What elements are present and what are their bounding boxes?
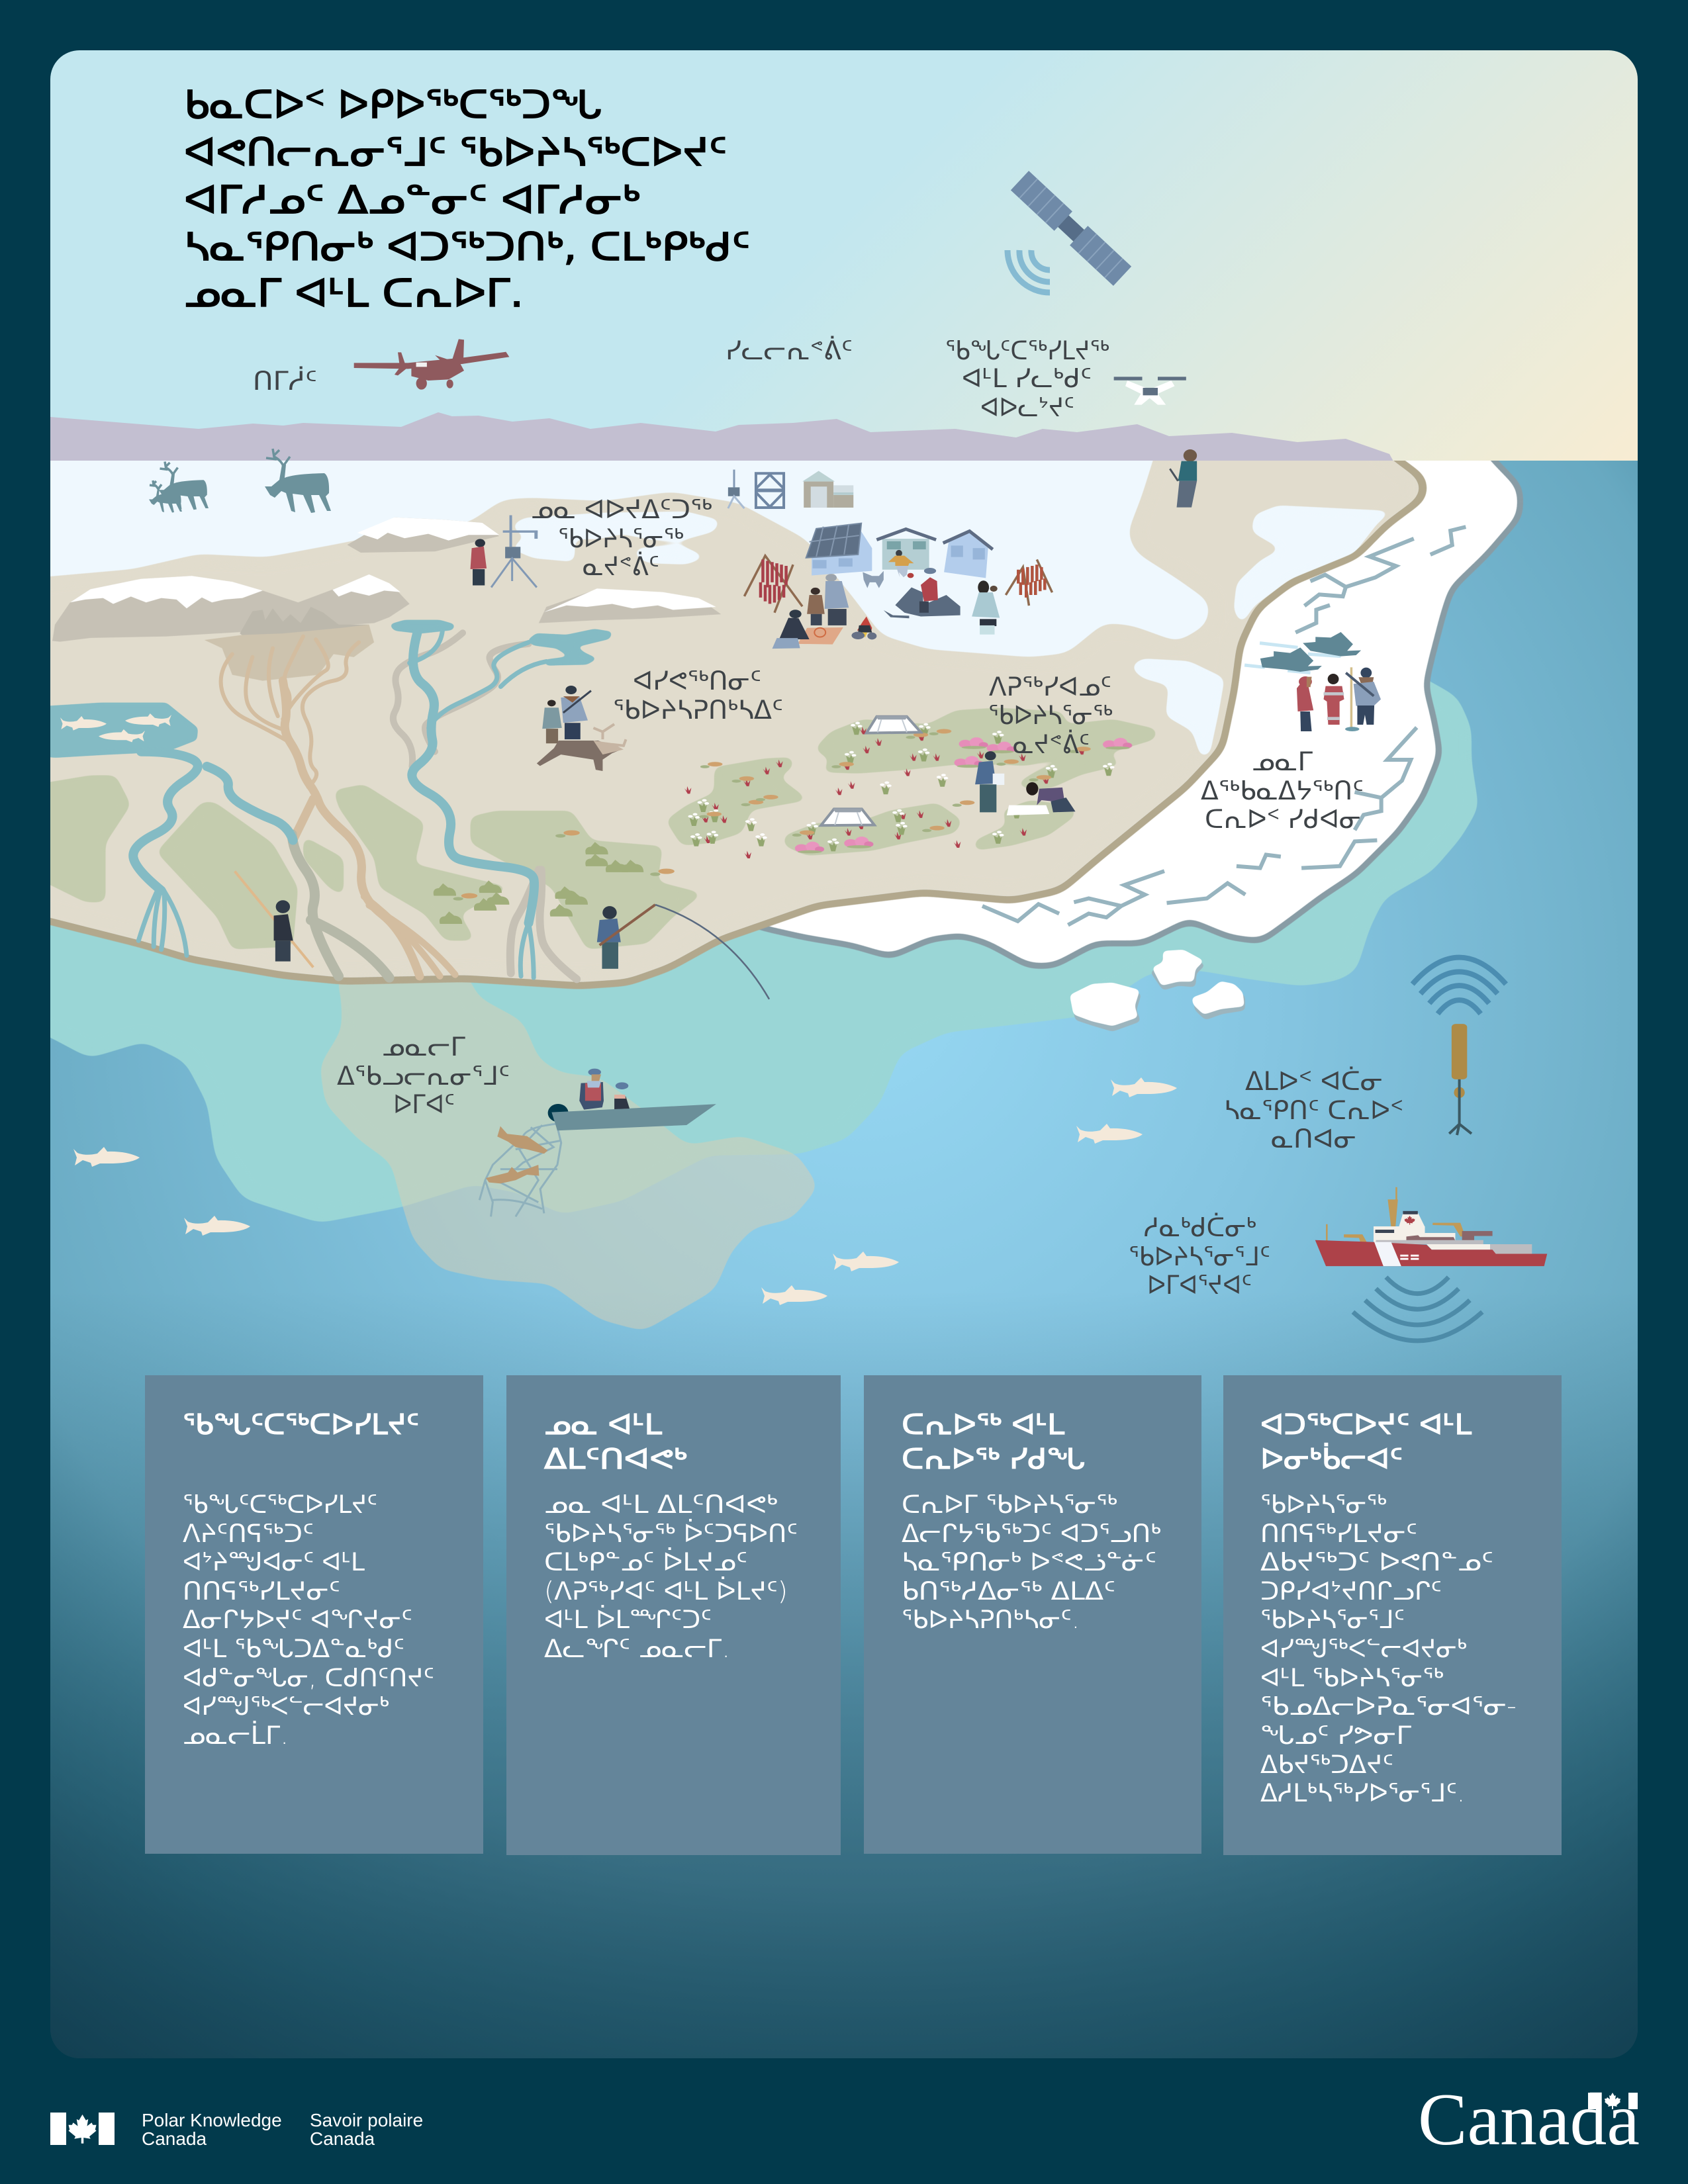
rod fisher <box>597 905 769 999</box>
snow capped hills <box>52 574 721 681</box>
elder <box>825 574 849 625</box>
sea <box>50 461 1638 2058</box>
text block: remote sensing: ᐊᒻᒪ ᖃᖓᑐᐃᓐᓇᒃᑯᑦ <box>183 1634 404 1663</box>
label: remote sensing: ᐊᐅᓚᔾᔪᑦ <box>980 393 1074 423</box>
title: ᑲᓇᑕᐅᑉ ᐅᑭᐅᖅᑕᖅᑐᖓ <box>184 82 602 127</box>
label: research vessels: ᐅᒥᐊᕐᔪᐊᑦ <box>1147 1271 1252 1300</box>
text block: remote sensing: ᐱᔨᑦᑎᕋᖅᑐᑦ <box>183 1519 314 1548</box>
label: permafrost research sites: ᓇᔪᕝᕖᑦ <box>583 551 659 582</box>
label: remote sensing <box>945 336 1109 423</box>
label: wildlife research tools: ᐊᓯᕙᖅᑎᓂᑦ <box>633 666 761 696</box>
label: workers on sea ice: ᓄᓇᒥ <box>1252 747 1313 777</box>
footer text: Savoir polaire Canada <box>310 2110 423 2149</box>
label: permafrost research sites <box>531 495 712 582</box>
text block: uses and products: ᐊᓯᙳᖅᐸᓪᓕᐊᔪᓂᒃ <box>1260 1634 1467 1663</box>
plastic greenhouse domes <box>821 716 921 825</box>
label: plant research sites: ᖃᐅᔨᓴᕐᓂᖅ <box>988 701 1113 731</box>
sensor buoy with signal <box>1413 958 1506 1135</box>
text block: uses and products: ᖓᓄᑦ ᓯᕗᓂᒥ <box>1260 1721 1411 1750</box>
heading: land and biodiversity: ᓄᓇ ᐊᒻᒪ <box>544 1408 663 1441</box>
label: plant research sites <box>988 672 1113 760</box>
lakes <box>30 620 612 758</box>
researcher with clipboard <box>975 751 1004 812</box>
snowmobiles on ice <box>1244 632 1361 673</box>
footer text: Savoir polaire Canada: Savoir polaire <box>310 2110 423 2130</box>
text block: land and biodiversity <box>544 1490 798 1663</box>
text block: uses and products: ᖃᓄᐃᓕᐅᕈᓇᕐᓂᐊᕐᓂ- <box>1260 1692 1517 1721</box>
label: community fishing boats <box>337 1032 510 1120</box>
text block: uses and products: ᖃᐅᔨᓴᕐᓂᖅ <box>1260 1490 1387 1519</box>
text block: ocean and sea ice <box>902 1490 1161 1634</box>
text block: remote sensing: ᐊᑯᓐᓂᖓᓂ, ᑕᑯᑎᑦᑎᔪᑦ <box>183 1663 434 1692</box>
label: workers on sea ice: ᑕᕆᐅᑉ ᓯᑯᐊᓂ <box>1205 805 1361 835</box>
text block: remote sensing <box>183 1490 434 1750</box>
label: underwater sensors: ᓴᓇᕿᑎᑦ ᑕᕆᐅᑉ <box>1224 1096 1403 1126</box>
text block: land and biodiversity: ᓄᓇ ᐊᒻᒪ ᐃᒪᑦᑎᐊᕙᒃ <box>544 1490 778 1519</box>
text block: ocean and sea ice: ᐃᓕᒋᔭᖃᖅᑐᑦ ᐊᑐᕐᓗᑎᒃ <box>902 1519 1161 1548</box>
heading: ocean and sea ice <box>902 1408 1085 1475</box>
snow patches <box>510 505 1393 758</box>
text block: ocean and sea ice: ᑲᑎᖅᓱᐃᓂᖅ ᐃᒪᐃᑦ <box>902 1576 1115 1606</box>
title: ᐊᕙᑎᓕᕆᓂᕐᒧᑦ ᖃᐅᔨᓴᖅᑕᐅᔪᑦ <box>184 130 727 175</box>
heading: uses and products <box>1260 1408 1472 1475</box>
text block: land and biodiversity: ᑕᒪᒃᑭᓐᓄᑦ ᐆᒪᔪᓄᑦ <box>544 1547 747 1576</box>
tan ground <box>20 430 1420 982</box>
label: underwater sensors <box>1224 1066 1403 1154</box>
satellite signal <box>1008 250 1050 293</box>
solar house <box>806 523 872 576</box>
snow covered land <box>20 424 1420 982</box>
label: underwater sensors: ᐃᒪᐅᑉ ᐊᑖᓂ <box>1245 1066 1383 1097</box>
label: plant research sites: ᐱᕈᖅᓯᐊᓄᑦ <box>989 672 1111 702</box>
panel: uses and products card <box>1260 1408 1517 1807</box>
heading: uses and products: ᐊᑐᖅᑕᐅᔪᑦ ᐊᒻᒪ <box>1260 1408 1472 1441</box>
blue house <box>943 531 993 578</box>
shoreline <box>20 424 1420 982</box>
research icebreaker with sonar <box>1315 1187 1547 1341</box>
label: research vessels: ᖃᐅᔨᓴᕐᓂᕐᒧᑦ <box>1129 1242 1270 1272</box>
text block: remote sensing: ᑎᑎᕋᖅᓯᒪᔪᓂᑦ <box>183 1576 340 1606</box>
heading: land and biodiversity: ᐃᒪᑦᑎᐊᕙᒃ <box>544 1443 687 1475</box>
sea ice with outline <box>20 417 1517 982</box>
text block: land and biodiversity: ᐃᓚᖏᑦ ᓄᓇᓕᒥ. <box>544 1634 730 1663</box>
footer text: Savoir polaire Canada: Canada <box>310 2128 375 2149</box>
green house <box>876 529 936 570</box>
label: wildlife research tools <box>613 666 783 725</box>
fishing area overlay <box>320 971 819 1332</box>
drying rack right <box>1006 559 1053 606</box>
ice cracks <box>982 527 1466 925</box>
footer text: Polar Knowledge Canada <box>142 2110 282 2149</box>
text block: remote sensing: ᐊᔾᔨᙳᐊᓂᑦ ᐊᒻᒪ <box>183 1547 365 1576</box>
text block: uses and products <box>1260 1490 1517 1807</box>
aeroplane <box>354 339 509 390</box>
label: permafrost research sites: ᖃᐅᔨᓴᕐᓂᖅ <box>558 524 684 554</box>
child with ball <box>888 550 914 578</box>
vegetation patches <box>19 707 1158 950</box>
label: plant research sites: ᓇᔪᕝᕖᑦ <box>1013 729 1090 760</box>
people on sea ice <box>1297 667 1381 731</box>
title <box>184 82 750 316</box>
mountains <box>50 412 1393 461</box>
text block: remote sensing: ᐃᓂᒋᔭᐅᔪᑦ ᐊᖏᔪᓂᑦ <box>183 1605 412 1634</box>
label: workers on sea ice: ᐃᖅᑲᓇᐃᔭᖅᑎᑦ <box>1201 776 1364 806</box>
ice floes <box>1070 950 1245 1031</box>
panel: ocean and sea ice card <box>902 1408 1161 1634</box>
text block: ocean and sea ice: ᑕᕆᐅᒥ ᖃᐅᔨᓴᕐᓂᖅ <box>902 1490 1117 1519</box>
drone <box>1114 377 1186 405</box>
title: ᓄᓇᒥ ᐊᒻᒪ ᑕᕆᐅᒥ. <box>184 271 524 316</box>
met mast, radar tower and cabin <box>728 470 853 508</box>
drone pilot <box>1170 449 1197 508</box>
label: aircraft: ᑎᒥᓲᑦ <box>253 366 317 396</box>
child in parka <box>807 588 825 625</box>
label: workers on sea ice <box>1201 747 1364 835</box>
village and camp <box>471 470 1076 815</box>
text block: uses and products: ᐃᓱᒪᒃᓴᖅᓯᐅᕐᓂᕐᒧᑦ. <box>1260 1778 1465 1807</box>
sea fish <box>73 1077 1177 1305</box>
text block: remote sensing: ᓄᓇᓕᒫᒥ. <box>183 1721 289 1750</box>
heading: land and biodiversity <box>544 1408 687 1475</box>
text block: uses and products: ᑎᑎᕋᖅᓯᒪᔪᓂᑦ <box>1260 1519 1417 1548</box>
fish in lake <box>60 713 171 743</box>
footer text: Polar Knowledge Canada: Polar Knowledge <box>142 2110 282 2130</box>
footer text: Polar Knowledge Canada: Canada <box>142 2128 207 2149</box>
panel: land and biodiversity card <box>544 1408 798 1663</box>
text block: ocean and sea ice: ᖃᐅᔨᓴᕈᑎᒃᓴᓂᑦ. <box>902 1605 1080 1634</box>
text block: uses and products: ᑐᑭᓯᐊᔾᔪᑎᒋᓗᒋᑦ <box>1260 1576 1442 1606</box>
title: ᐊᒥᓱᓄᑦ ᐃᓄᓐᓂᑦ ᐊᒥᓱᓂᒃ <box>184 177 640 222</box>
Canada wordmark: Canada <box>1418 2079 1640 2161</box>
heading: uses and products: ᐅᓂᒃᑳᓕᐊᑦ <box>1260 1443 1403 1475</box>
campfire <box>851 617 876 639</box>
tundra plants <box>684 716 1132 858</box>
label: underwater sensors: ᓇᑎᐊᓂ <box>1271 1124 1356 1154</box>
sky <box>50 50 1638 461</box>
label: wildlife research tools: ᖃᐅᔨᓴᕈᑎᒃᓴᐃᑦ <box>613 696 783 725</box>
label: weather stations: ᓯᓚᓕᕆᕝᕖᑦ <box>726 336 853 366</box>
dog <box>863 571 884 588</box>
satellite <box>1011 171 1131 286</box>
text block: land and biodiversity: ᖃᐅᔨᓴᕐᓂᖅ ᐆᑦᑐᕋᐅᑎᑦ <box>544 1519 798 1548</box>
weather station and researcher <box>471 515 538 588</box>
text block: land and biodiversity: (ᐱᕈᖅᓯᐊᑦ ᐊᒻᒪ ᐆᒪᔪᑦ) <box>544 1576 788 1606</box>
woman carrying baby <box>972 580 1000 635</box>
text block: remote sensing: ᖃᖓᑦᑕᖅᑕᐅᓯᒪᔪᑦ <box>183 1490 377 1519</box>
caribou herd <box>149 449 331 513</box>
text block: uses and products: ᐃᑲᔪᖅᑐᑦ ᐅᕙᑎᓐᓄᑦ <box>1260 1547 1493 1576</box>
shrubs <box>434 830 675 924</box>
heading: ocean and sea ice: ᑕᕆᐅᖅ ᐊᒻᒪ <box>902 1408 1065 1441</box>
label: research vessels: ᓱᓇᒃᑯᑖᓂᒃ <box>1144 1212 1256 1243</box>
hunter and child <box>542 686 591 743</box>
kneeling man and mat <box>772 610 843 649</box>
panel: remote sensing card <box>183 1408 434 1750</box>
title: ᓴᓇᕿᑎᓂᒃ ᐊᑐᖅᑐᑎᒃ, ᑕᒪᒃᑭᒃᑯᑦ <box>184 224 750 269</box>
text block: land and biodiversity: ᐊᒻᒪ ᐆᒪᙱᑦᑐᑦ <box>544 1605 712 1634</box>
text block: remote sensing: ᐊᓯᙳᖅᐸᓪᓕᐊᔪᓂᒃ <box>183 1692 389 1721</box>
shallow coastal water <box>26 596 1479 1223</box>
label: research vessels <box>1129 1212 1270 1300</box>
kneeling researcher with quadrat <box>1007 782 1076 815</box>
label: community fishing boats: ᐃᖃᓗᓕᕆᓂᕐᒧᑦ <box>337 1062 510 1091</box>
text block: ocean and sea ice: ᓴᓇᕿᑎᓂᒃ ᐅᕝᕙᓘᓐᓃᑦ <box>902 1547 1156 1576</box>
person on snowmobile <box>884 568 961 618</box>
drying rack left <box>744 556 802 613</box>
sea depth shading <box>50 1291 1638 2058</box>
rivers <box>133 631 577 979</box>
boat with fishers and net <box>479 1069 716 1216</box>
text block: uses and products: ᐃᑲᔪᖅᑐᐃᔪᑦ <box>1260 1750 1393 1779</box>
label: community fishing boats: ᐅᒥᐊᑦ <box>393 1090 455 1120</box>
heading: remote sensing: ᖃᖓᑦᑕᖅᑕᐅᓯᒪᔪᑦ <box>183 1408 419 1441</box>
spear fisher <box>235 871 313 968</box>
heading: ocean and sea ice: ᑕᕆᐅᖅ ᓯᑯᖓ <box>902 1443 1085 1475</box>
label: community fishing boats: ᓄᓇᓕᒥ <box>382 1032 465 1062</box>
text block: uses and products: ᐊᒻᒪ ᖃᐅᔨᓴᕐᓂᖅ <box>1260 1663 1444 1692</box>
label: remote sensing: ᖃᖓᑦᑕᖅᓯᒪᔪᖅ <box>945 336 1109 366</box>
text block: uses and products: ᖃᐅᔨᓴᕐᓂᕐᒧᑦ <box>1260 1605 1405 1634</box>
label: remote sensing: ᐊᒻᒪ ᓯᓚᒃᑯᑦ <box>962 364 1092 394</box>
footer logo: Canada flag symbol <box>50 2113 115 2145</box>
card panel backgrounds <box>145 1375 1562 1855</box>
caribou harvest <box>537 724 626 771</box>
label: permafrost research sites: ᓄᓇ ᐊᐅᔪᐃᑦᑐᖅ <box>531 495 712 525</box>
